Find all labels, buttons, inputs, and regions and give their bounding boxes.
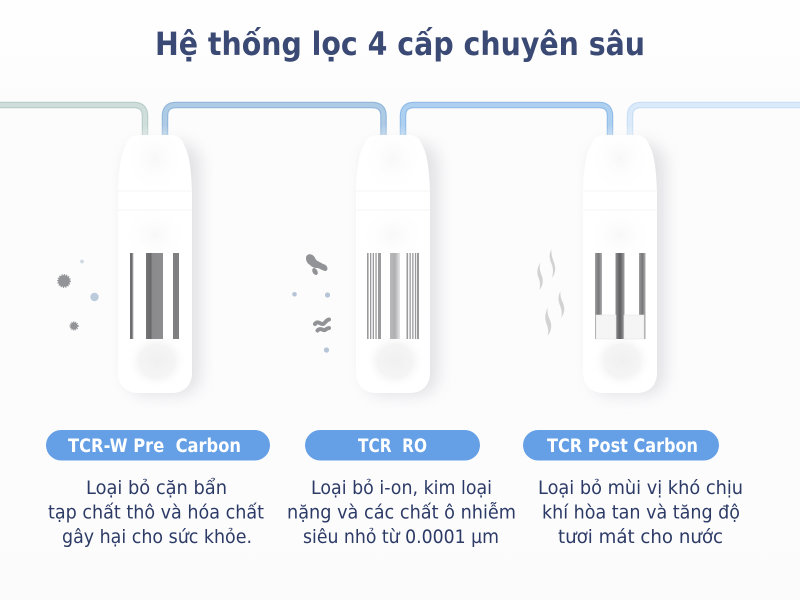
label: TCR-W Pre Carbon — [46, 430, 270, 460]
filter 1: TCR-W Pre Carbon cartridge — [118, 123, 200, 395]
description: TCR RO: nặng và các chất ô nhiễm — [287, 500, 516, 524]
filter 3: TCR Post Carbon cartridge — [583, 123, 665, 395]
label: TCR Post Carbon — [523, 430, 719, 460]
title: Hệ thống lọc 4 cấp chuyên sâu — [155, 25, 645, 63]
icon: heavy metal and ion particles — [292, 254, 330, 353]
description: TCR-W Pre Carbon: Loại bỏ cặn bẩn — [86, 477, 227, 499]
label: TCR RO: TCR RO — [358, 436, 427, 457]
label: TCR Post Carbon: TCR Post Carbon — [547, 436, 698, 457]
filter 2: TCR RO cartridge — [356, 123, 438, 395]
pipe: first to second filter — [165, 105, 384, 136]
description: TCR RO — [287, 477, 516, 548]
pipe: inlet to first filter — [0, 105, 145, 136]
pipe: third filter outlet — [630, 105, 800, 136]
icon: sediment particles — [58, 260, 99, 330]
description: TCR Post Carbon — [538, 477, 743, 548]
description: TCR RO: siêu nhỏ từ 0.0001 µm — [303, 526, 499, 548]
description: TCR-W Pre Carbon: tạp chất thô và hóa chất — [48, 502, 264, 524]
description: TCR RO: Loại bỏ i-on, kim loại — [311, 477, 492, 499]
description: TCR-W Pre Carbon: gây hại cho sức khỏe. — [62, 526, 252, 548]
label: TCR RO — [305, 430, 480, 460]
description: TCR Post Carbon: khí hòa tan và tăng độ — [542, 502, 740, 524]
pipe: second to third filter — [403, 105, 610, 136]
description: TCR-W Pre Carbon — [48, 477, 264, 548]
description: TCR Post Carbon: tươi mát cho nước — [558, 526, 723, 548]
label: TCR-W Pre Carbon: TCR-W Pre Carbon — [68, 436, 241, 457]
icon: odour wisps — [537, 249, 564, 336]
description: TCR Post Carbon: Loại bỏ mùi vị khó chịu — [538, 477, 743, 499]
